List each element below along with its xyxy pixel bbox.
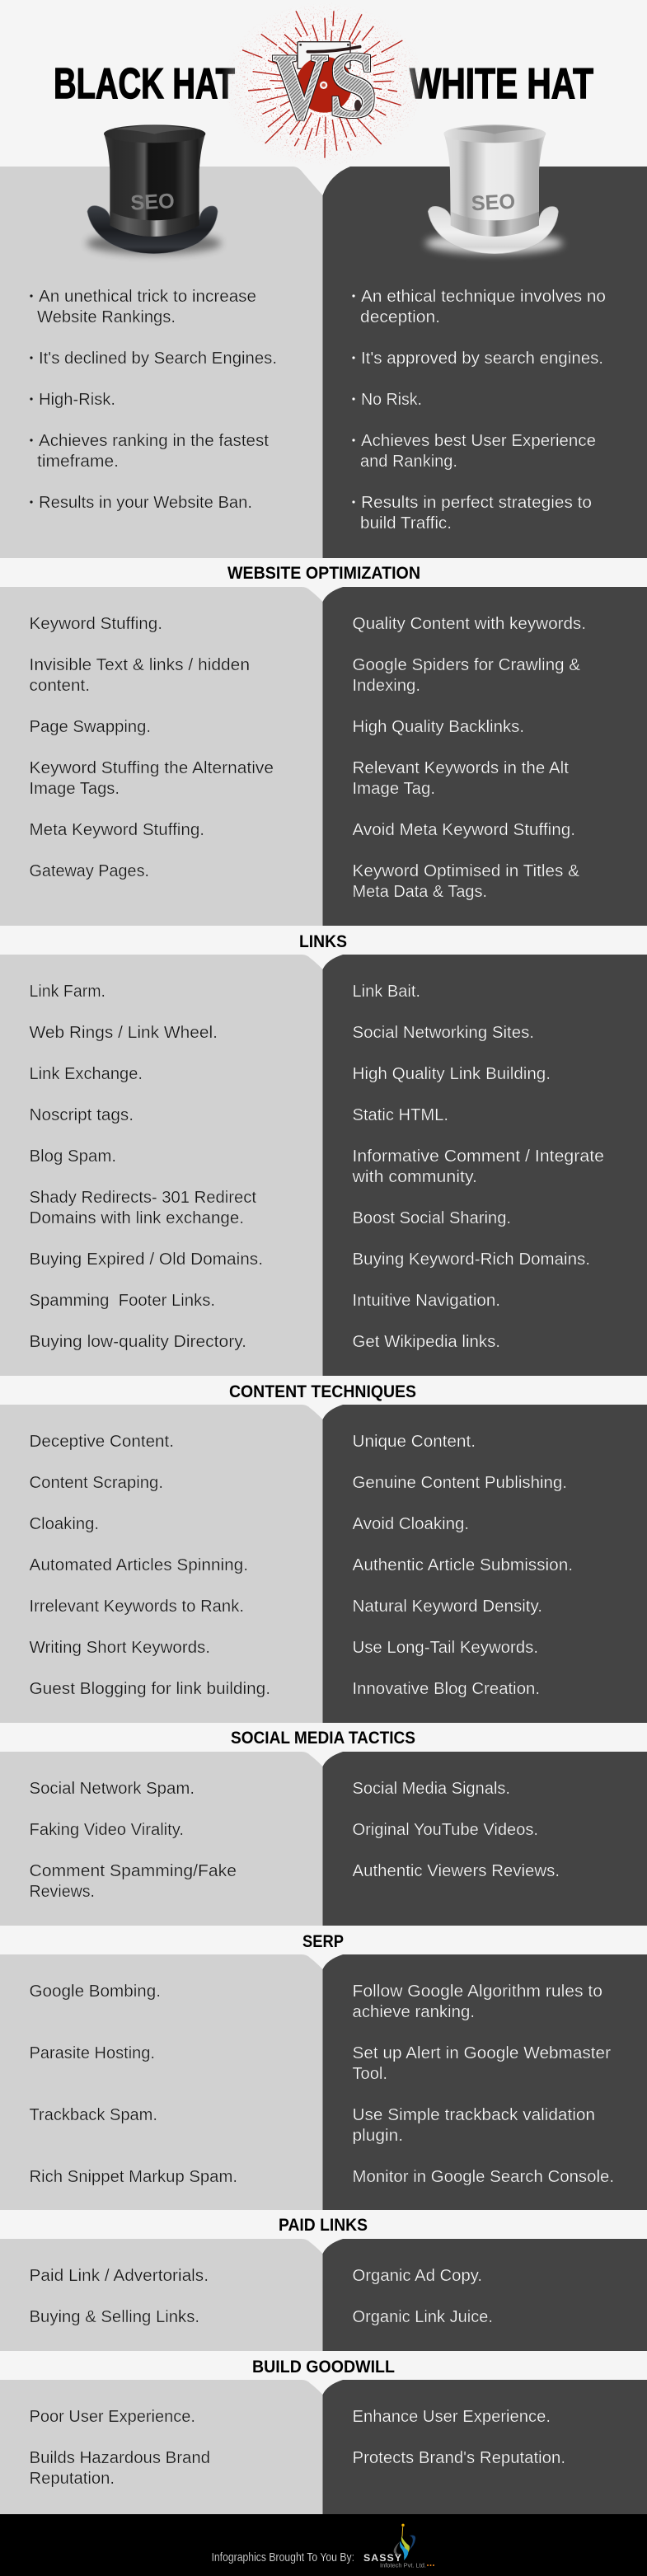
text block: build goodwill black hat: Poor User Experience.	[30, 2408, 195, 2426]
text block: social media white hat: Authentic Viewers Reviews.	[353, 1862, 560, 1880]
text block: white hat definition: It's approved by search engines.	[361, 350, 603, 368]
text block: white hat definition: Achieves best User Experience	[361, 432, 596, 450]
text block: website optimization white hat: Indexing.	[353, 677, 420, 695]
text block: links black hat: Link Farm.	[30, 983, 105, 1001]
footer credit text: Infographics Brought To You By:	[211, 2550, 354, 2564]
text block: website optimization white hat	[353, 615, 586, 901]
text block: build goodwill white hat: Enhance User Experience.	[353, 2408, 551, 2426]
panel: content techniques backgrounds	[0, 1405, 647, 1723]
label: SEO on white hat: SEO	[471, 190, 516, 215]
text block: links white hat: High Quality Link Building.	[353, 1065, 551, 1083]
text block: links black hat	[30, 983, 263, 1351]
text block: SERP white hat: plugin.	[353, 2127, 403, 2145]
text block: content techniques white hat: Innovative Blog Creation.	[353, 1680, 540, 1698]
icon: VS emblem with red burst	[221, 0, 427, 169]
text block: social media black hat: Social Network Spam.	[30, 1780, 195, 1798]
text block: black hat definition: Website Rankings.	[37, 308, 176, 326]
text block: links black hat: Blog Spam.	[30, 1147, 116, 1166]
panel: social media tactics backgrounds	[0, 1752, 647, 1926]
text block: white hat definition: Results in perfect strategies to	[361, 494, 592, 512]
panel: links backgrounds	[0, 955, 647, 1376]
text block: website optimization black hat: content.	[30, 677, 90, 695]
text block: website optimization black hat: Keyword Stuffing.	[30, 615, 162, 633]
text block: white hat definition: An ethical technique involves no	[361, 288, 606, 306]
text block: links black hat: Noscript tags.	[30, 1106, 134, 1124]
icon: VS emblem with red burst: S	[329, 34, 377, 137]
text block: black hat definition: Achieves ranking in the fastest	[39, 432, 269, 450]
text block: links black hat: Domains with link exchange.	[30, 1209, 244, 1227]
text block: website optimization black hat: Gateway Pages.	[30, 862, 149, 880]
text block: build goodwill black hat	[30, 2408, 210, 2488]
text block: white hat definition: No Risk.	[361, 391, 422, 409]
text block: links black hat: Spamming Footer Links.	[30, 1292, 215, 1310]
text block: social media white hat	[353, 1780, 560, 1880]
text block: SERP white hat: Monitor in Google Search Console.	[353, 2168, 614, 2186]
text block: social media black hat: Reviews.	[30, 1883, 95, 1901]
text block: links black hat: Shady Redirects- 301 Redirect	[30, 1189, 256, 1207]
footer	[0, 2514, 647, 2576]
panel: intro comparison backgrounds	[0, 167, 647, 558]
heading: Content Techniques: CONTENT TECHNIQUES	[229, 1382, 416, 1401]
text block: content techniques white hat: Use Long-Tail Keywords.	[353, 1639, 538, 1657]
text block: black hat definition: High-Risk.	[39, 391, 115, 409]
text block: website optimization black hat: Invisible Text & links / hidden	[30, 656, 250, 674]
text block: website optimization white hat: Quality Content with keywords.	[353, 615, 586, 633]
text block: content techniques black hat: Content Scraping.	[30, 1474, 163, 1492]
text block: website optimization black hat	[30, 615, 274, 880]
text block: content techniques black hat	[30, 1433, 270, 1698]
text block: SERP white hat: Set up Alert in Google Webmaster	[353, 2044, 611, 2062]
text block: content techniques white hat: Unique Content.	[353, 1433, 476, 1451]
text block: website optimization white hat: High Quality Backlinks.	[353, 718, 524, 736]
text block: SERP white hat: Use Simple trackback validation	[353, 2106, 595, 2124]
text block: content techniques white hat: Natural Keyword Density.	[353, 1598, 542, 1616]
text block: build goodwill black hat: Reputation.	[30, 2470, 115, 2488]
text block: links white hat: Boost Social Sharing.	[353, 1209, 511, 1227]
text block: links white hat	[351, 983, 604, 1351]
text block: social media white hat: Original YouTube Videos.	[353, 1821, 538, 1839]
text block: links white hat: Buying Keyword-Rich Domains.	[353, 1250, 590, 1269]
text block: black hat definition: It's declined by Search Engines.	[39, 350, 277, 368]
text block: paid links white hat	[353, 2267, 493, 2326]
text block: SERP black hat: Parasite Hosting.	[30, 2044, 155, 2062]
heading: Paid Links: PAID LINKS	[279, 2216, 368, 2235]
text block: paid links white hat: Organic Link Juice.	[353, 2308, 493, 2326]
text block: SERP black hat: Trackback Spam.	[30, 2106, 157, 2124]
heading: Website Optimization: WEBSITE OPTIMIZATION	[227, 564, 420, 583]
icon: white top hat	[425, 124, 563, 254]
icon: VS emblem with red burst: V	[273, 35, 328, 138]
icon: black top hat	[87, 124, 221, 254]
panel: build goodwill backgrounds	[0, 2380, 647, 2514]
text block: website optimization white hat: Image Tag.	[353, 780, 435, 798]
text block: links black hat: Link Exchange.	[30, 1065, 143, 1083]
text block: content techniques black hat: Irrelevant Keywords to Rank.	[30, 1598, 244, 1616]
text block: black hat definition: An unethical trick to increase	[39, 288, 256, 306]
panel: paid links backgrounds	[0, 2239, 647, 2351]
text block: links white hat: Social Networking Sites.	[353, 1024, 534, 1042]
text block: social media black hat: Comment Spamming/Fake	[30, 1862, 237, 1880]
text block: content techniques white hat	[353, 1433, 573, 1698]
text block: SERP white hat: Follow Google Algorithm rules to	[353, 1982, 602, 2001]
text block: build goodwill black hat: Builds Hazardous Brand	[30, 2449, 210, 2467]
heading: Build Goodwill: BUILD GOODWILL	[252, 2358, 395, 2377]
title: Black Hat: BLACK HAT	[54, 60, 235, 108]
text block: social media black hat	[30, 1780, 237, 1901]
text block: paid links black hat	[30, 2267, 209, 2326]
logo sub-wordmark: Infotech Pvt. Ltd.	[380, 2562, 426, 2569]
text block: white hat definition: deception.	[360, 308, 440, 326]
logo wordmark: SASSY	[363, 2552, 402, 2564]
heading: SERP: SERP	[302, 1932, 344, 1951]
text block: SERP white hat	[353, 1982, 614, 2186]
text block: SERP white hat: Tool.	[353, 2065, 387, 2083]
text block: black hat definition	[30, 288, 277, 512]
text block: social media white hat: Social Media Signals.	[353, 1780, 510, 1798]
text block: content techniques black hat: Automated Articles Spinning.	[30, 1556, 248, 1574]
text block: website optimization white hat: Meta Data & Tags.	[353, 883, 487, 901]
text block: content techniques black hat: Writing Short Keywords.	[30, 1639, 210, 1657]
text block: white hat definition: build Traffic.	[360, 514, 452, 533]
label: SEO on black hat: SEO	[130, 190, 175, 215]
text block: links black hat: Web Rings / Link Wheel.	[30, 1024, 218, 1042]
text block: links white hat: with community.	[351, 1168, 477, 1186]
text block: website optimization black hat: Page Swapping.	[30, 718, 151, 736]
text block: SERP black hat: Rich Snippet Markup Spam.	[30, 2168, 237, 2186]
text block: website optimization black hat: Meta Keyword Stuffing.	[30, 821, 204, 839]
heading: Social Media Tactics: SOCIAL MEDIA TACTICS	[231, 1729, 415, 1748]
text block: links white hat: Get Wikipedia links.	[353, 1333, 500, 1351]
text block: website optimization black hat: Keyword Stuffing the Alternative	[30, 759, 274, 777]
text block: content techniques white hat: Avoid Cloaking.	[353, 1515, 469, 1533]
text block: content techniques black hat: Cloaking.	[30, 1515, 99, 1533]
text block: content techniques white hat: Authentic Article Submission.	[353, 1556, 573, 1574]
text block: website optimization white hat: Relevant Keywords in the Alt	[353, 759, 569, 777]
icon: Sassy Infotech logo	[363, 2524, 434, 2569]
text block: SERP black hat	[30, 1982, 237, 2186]
text block: links white hat: Informative Comment / Integrate	[353, 1147, 604, 1166]
text block: website optimization black hat: Image Tags.	[30, 780, 120, 798]
text block: content techniques black hat: Guest Blogging for link building.	[30, 1680, 270, 1698]
text block: SERP white hat: achieve ranking.	[353, 2003, 475, 2021]
text block: paid links black hat: Buying & Selling Links.	[30, 2308, 199, 2326]
text block: content techniques black hat: Deceptive Content.	[30, 1433, 174, 1451]
text block: links white hat: Link Bait.	[353, 983, 420, 1001]
text block: white hat definition	[352, 288, 606, 533]
text block: links black hat: Buying low-quality Directory.	[30, 1333, 246, 1351]
text block: links white hat: Static HTML.	[353, 1106, 448, 1124]
text block: content techniques white hat: Genuine Content Publishing.	[353, 1474, 567, 1492]
text block: build goodwill white hat	[353, 2408, 565, 2467]
panel: website optimization backgrounds	[0, 587, 647, 926]
text block: website optimization white hat: Avoid Meta Keyword Stuffing.	[353, 821, 575, 839]
text block: paid links black hat: Paid Link / Advertorials.	[30, 2267, 209, 2285]
text block: black hat definition: Results in your Website Ban.	[39, 494, 252, 512]
text block: white hat definition: and Ranking.	[360, 453, 457, 471]
heading: Links: LINKS	[299, 932, 347, 951]
text block: social media black hat: Faking Video Virality.	[30, 1821, 184, 1839]
text block: SERP black hat: Google Bombing.	[30, 1982, 161, 2001]
title: White Hat: WHITE HAT	[410, 60, 593, 108]
text block: paid links white hat: Organic Ad Copy.	[353, 2267, 482, 2285]
logo dots	[427, 2564, 434, 2566]
text block: build goodwill white hat: Protects Brand's Reputation.	[353, 2449, 565, 2467]
text block: links white hat: Intuitive Navigation.	[353, 1292, 500, 1310]
text block: black hat definition: timeframe.	[37, 453, 119, 471]
text block: website optimization white hat: Keyword Optimised in Titles &	[353, 862, 580, 880]
text block: website optimization white hat: Google Spiders for Crawling &	[353, 656, 581, 674]
text block: links black hat: Buying Expired / Old Domains.	[30, 1250, 263, 1269]
panel: SERP backgrounds	[0, 1954, 647, 2210]
